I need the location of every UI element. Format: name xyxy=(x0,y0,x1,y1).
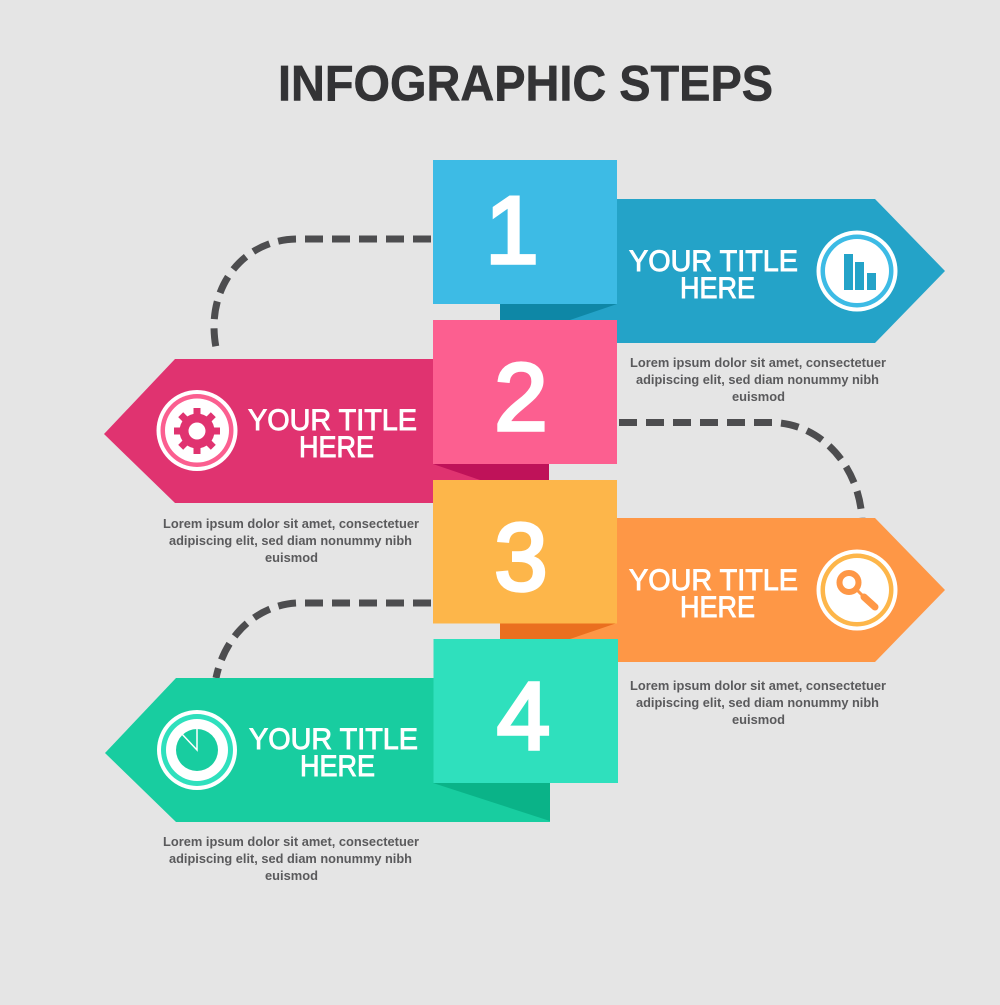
icon: gear xyxy=(156,390,238,471)
connector: step 1 to step 2 xyxy=(214,239,431,352)
text block: step 2 description: Lorem ipsum dolor sit amet, consectetuer xyxy=(163,516,419,531)
fold shadow: step 2 xyxy=(433,464,549,480)
panel: number 4 card xyxy=(434,639,618,783)
panel: number 1 card: 1 xyxy=(485,177,539,284)
heading: step 3 title: HERE xyxy=(680,591,755,624)
heading: step 3 title: YOUR TITLE xyxy=(629,564,798,597)
icon: pie clock xyxy=(157,710,237,790)
heading: step 2 title xyxy=(248,404,417,464)
text block: step 1 description xyxy=(630,355,886,404)
panel: number 1 card xyxy=(433,160,617,304)
panel: number 2 card: 2 xyxy=(494,344,548,451)
heading: step 4 title xyxy=(249,723,418,783)
text block: step 2 description: adipiscing elit, sed diam nonummy nibh xyxy=(169,533,412,548)
heading: step 1 title: HERE xyxy=(680,272,755,305)
heading: step 1 title xyxy=(629,245,798,305)
text block: step 1 description: adipiscing elit, sed diam nonummy nibh xyxy=(636,372,879,387)
panel: step 3 arrow xyxy=(500,518,945,662)
panel: step 4 arrow xyxy=(105,678,550,822)
text block: step 4 description xyxy=(163,834,419,883)
heading: step 2 title: YOUR TITLE xyxy=(248,404,417,437)
connector: step 3 to step 4 xyxy=(216,603,431,678)
panel: step 2 arrow xyxy=(104,359,549,503)
panel: step 1 arrow xyxy=(500,199,945,343)
title: INFOGRAPHIC STEPS xyxy=(278,56,773,112)
fold shadow: step 4 xyxy=(433,783,550,821)
heading: step 4 title: HERE xyxy=(300,750,375,783)
icon: bar chart xyxy=(816,230,898,312)
heading: step 3 title xyxy=(629,564,798,624)
text block: step 4 description: adipiscing elit, sed diam nonummy nibh xyxy=(169,851,412,866)
text block: step 3 description: adipiscing elit, sed diam nonummy nibh xyxy=(636,695,879,710)
text block: step 3 description: Lorem ipsum dolor sit amet, consectetuer xyxy=(630,678,886,693)
heading: step 4 title: YOUR TITLE xyxy=(249,723,418,756)
icon: magnifier xyxy=(816,550,898,630)
text block: step 1 description: euismod xyxy=(732,389,785,404)
heading: step 2 title: HERE xyxy=(299,431,374,464)
text block: step 4 description: Lorem ipsum dolor sit amet, consectetuer xyxy=(163,834,419,849)
text block: step 3 description: euismod xyxy=(732,712,785,727)
text block: step 2 description: euismod xyxy=(265,550,318,565)
text block: step 3 description xyxy=(630,678,886,727)
text block: step 1 description: Lorem ipsum dolor sit amet, consectetuer xyxy=(630,355,886,370)
panel: number 3 card xyxy=(433,480,617,624)
heading: step 1 title: YOUR TITLE xyxy=(629,245,798,278)
fold shadow: step 3 xyxy=(500,623,617,639)
panel: number 3 card: 3 xyxy=(494,504,548,611)
text block: step 2 description xyxy=(163,516,419,565)
panel: number 2 card xyxy=(433,320,617,464)
text block: step 4 description: euismod xyxy=(265,868,318,883)
fold shadow: step 1 xyxy=(500,304,617,320)
panel: number 4 card: 4 xyxy=(497,663,550,770)
connector: step 2 to step 3 xyxy=(619,422,862,518)
